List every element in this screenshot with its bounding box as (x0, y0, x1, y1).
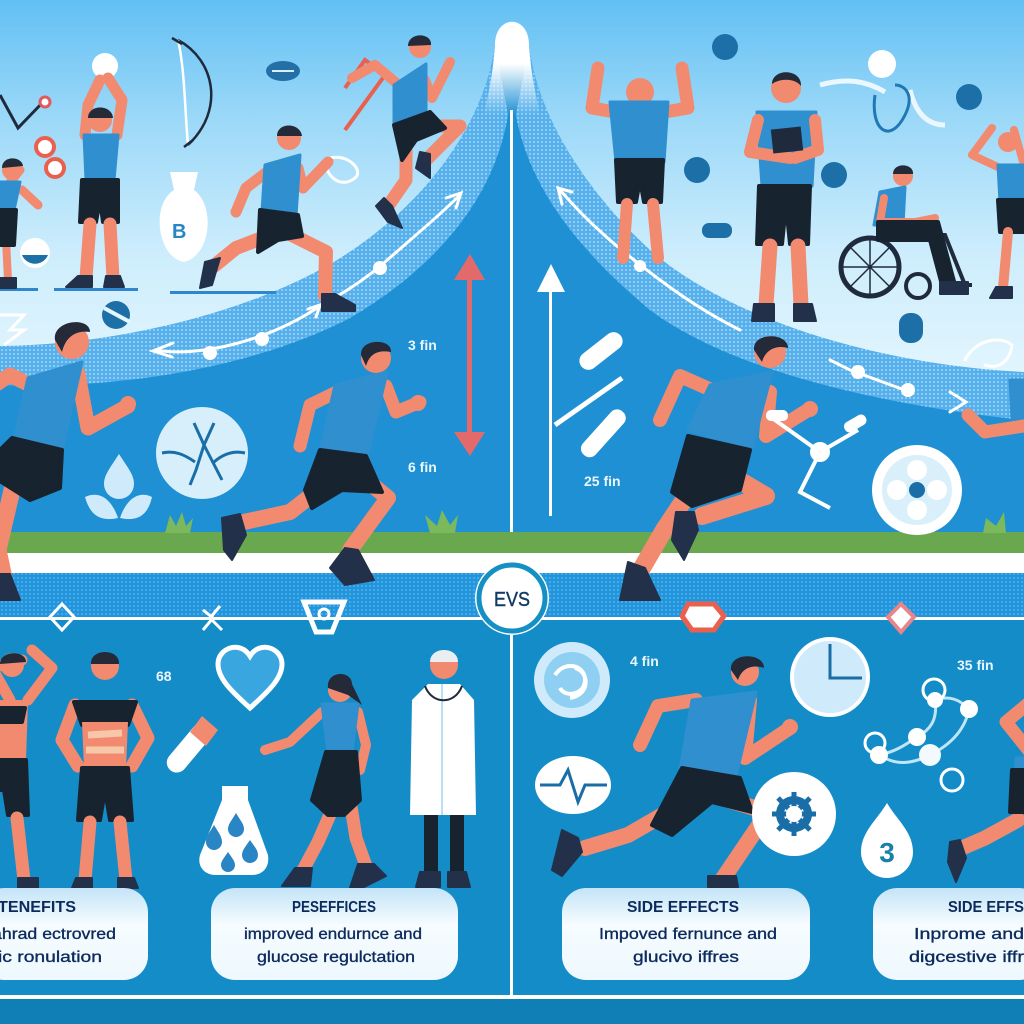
icon: film reel disc (872, 445, 962, 535)
icon: test tube (163, 716, 218, 777)
track icons (50, 602, 914, 632)
icon: flask with drops (199, 786, 268, 875)
icon: capsule and syringe group (555, 329, 629, 461)
left curved route arrow (153, 193, 461, 360)
person: man with arms raised (592, 68, 688, 258)
card: side effects 1: glucivo iffres (633, 949, 739, 966)
icon: bow (172, 38, 211, 147)
label: 35 fin: 35 fin (957, 657, 994, 673)
label: 25 fin: 25 fin (584, 473, 621, 489)
arrow: red double arrow (454, 254, 485, 456)
panel: upper scene base (0, 0, 1024, 533)
icon: gear disc (752, 772, 836, 856)
runner: mid-left foreground (0, 322, 136, 600)
label: 4 fin: 4 fin (630, 653, 659, 669)
person: arm at right edge (968, 380, 1024, 432)
lower panels frame (0, 620, 1024, 1024)
person: small figure at left edge (0, 158, 38, 288)
icon: dumbbell line at top left (0, 95, 64, 177)
EVS badge: EVS (494, 589, 530, 611)
card: side effects 2 (873, 888, 1024, 980)
card: benefits 2: glucose regulctation (257, 949, 415, 966)
card: benefits 2: improved endurnce and (244, 926, 422, 943)
label: 68: 68 (156, 668, 172, 684)
person: lower left woman (0, 650, 52, 888)
icon: small disc (20, 238, 50, 268)
card: benefits 2: PESEFFICES (292, 899, 376, 916)
icon: numbered drop (861, 803, 913, 878)
panel: sky left and right (0, 0, 1024, 372)
card: benefits 1: ic ronulation (0, 949, 102, 966)
icon: heart (218, 647, 282, 708)
white peak and centre divider (484, 22, 540, 533)
person: lower left man (62, 652, 148, 888)
card: side effects 1: SIDE EFFECTS (627, 899, 739, 916)
card: benefits 2 (211, 888, 458, 980)
right curved route arrow (558, 188, 1012, 412)
icon: numbered drop: 3 (879, 837, 895, 868)
icon: small pill top (266, 61, 300, 81)
card: benefits 1: TENEFITS (0, 899, 76, 916)
icon: scattered pills right side (684, 34, 982, 343)
runner: mid-right foreground (620, 336, 818, 600)
runner: lower far right (948, 702, 1024, 882)
icon: vitamin B bottle: B (172, 221, 186, 243)
card: side effects 1: Impoved fernunce and (599, 926, 777, 943)
icon: vitamin B bottle (160, 172, 208, 262)
runner: lower centre right (552, 656, 798, 887)
person: doctor in white coat (410, 650, 476, 887)
panel: upper right dotted band (516, 45, 1024, 420)
grass and running track (0, 510, 1024, 620)
icon: capsule disc left (102, 301, 130, 329)
EVS badge (475, 561, 549, 635)
icon: crack disc (156, 407, 248, 499)
panel: upper left dotted band (0, 45, 508, 386)
icon: drop and leaves (85, 454, 152, 519)
card: side effects 2: Inprome and (914, 926, 1024, 943)
person: lower centre woman walking (265, 674, 386, 888)
ground lines under upper figures (0, 288, 276, 294)
person: lunging runner with band (200, 60, 385, 311)
icon: lightning marks at left (0, 315, 24, 345)
arrow: white up arrow (537, 264, 565, 516)
icon: pulse lozenge (535, 756, 611, 814)
icon: molecule chain (865, 679, 978, 791)
person: jumping runner (352, 35, 460, 228)
runner: mid-centre-left foreground (222, 342, 426, 585)
icon: clock disc (792, 639, 868, 715)
icon: winged symbol top right (820, 50, 945, 131)
label: 6 fin: 6 fin (408, 459, 437, 475)
person: wheelchair user (841, 165, 972, 298)
card: side effects 2: digcestive iffr (909, 949, 1024, 966)
person: lifting a ball overhead (66, 53, 124, 287)
label: 3 fin: 3 fin (408, 337, 437, 353)
person: woman stretching at right (972, 128, 1024, 298)
icon: molecule drone (768, 412, 866, 508)
card: benefits 1 (0, 888, 148, 980)
icon: sprocket disc (534, 642, 610, 718)
person: trainer with clipboard (750, 72, 818, 321)
card: side effects 1 (562, 888, 810, 980)
